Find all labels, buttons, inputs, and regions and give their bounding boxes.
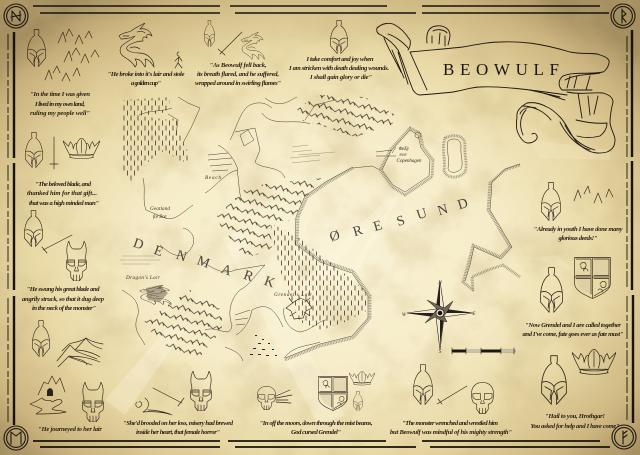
quote: Beowulf fell back	[195, 62, 281, 87]
ORESUND label: D	[456, 196, 470, 213]
DENMARK label: M	[195, 254, 212, 272]
quote: already in youth: glorious deeds!"	[558, 235, 598, 242]
icon: lair mountain and horned skull	[30, 376, 104, 422]
quote: called together	[522, 322, 624, 338]
quote: already in youth: "Already in youth I have done many	[534, 226, 623, 233]
quote: comfort and joy: I shall gain glory or die"	[309, 74, 372, 81]
DENMARK label: A	[219, 262, 234, 280]
map labels	[125, 146, 422, 298]
quote: journeyed: "He journeyed to her lair	[38, 426, 102, 433]
ORESUND label: S	[395, 213, 407, 230]
forest: north west	[122, 97, 192, 182]
icon: helmet and shield	[541, 258, 610, 312]
icon: helmet and mountains	[27, 29, 99, 81]
map	[120, 95, 520, 361]
quote: I was given: "In the time I was given	[30, 91, 90, 98]
DENMARK label: N	[174, 248, 189, 265]
quote: wrestled	[390, 420, 512, 436]
quote: comfort and joy	[288, 56, 389, 81]
ORESUND label: N	[436, 202, 450, 219]
icon: helmet over quote	[330, 20, 348, 54]
quote: I was given: I lived in my own land,	[34, 101, 85, 108]
DENMARK label: E	[152, 243, 165, 260]
quote: off the moors	[260, 420, 373, 436]
icon: helmet, sword and crown	[25, 132, 100, 169]
ORESUND label: U	[415, 206, 429, 223]
forts and settlements	[208, 147, 396, 356]
forest: east coast	[270, 223, 368, 330]
quote: Beowulf fell back: its breath flared, and he suffered,	[197, 71, 279, 78]
dragon's lair icon	[140, 285, 171, 305]
rivers and northern lakes	[120, 97, 335, 361]
quote: comfort and joy: I take comfort and joy when	[306, 56, 374, 63]
compass rose	[402, 280, 476, 355]
icon: dragon and walking figure	[119, 23, 182, 68]
quote: comfort and joy: I am stricken with death dealing wounds.	[288, 65, 389, 72]
ORESUND label: Ø	[328, 228, 342, 245]
eastern shore	[463, 164, 520, 290]
grendel's lair icon	[286, 298, 312, 319]
quote: off the moors: "In off the moors, down through the mist beams,	[260, 420, 373, 427]
quote: brooded: inside her heart, that female horror"	[136, 429, 220, 436]
map labels: Geatland	[150, 206, 170, 212]
quote: brooded	[123, 420, 234, 436]
island with Copenhagen	[353, 128, 433, 195]
quote: brooded: "She'd brooded on her loss, misery had brewed	[123, 420, 234, 427]
map labels: for Bor.	[153, 213, 168, 220]
quote: Beowulf fell back: "As Beowulf fell back,	[210, 62, 267, 69]
map labels: Grendel's Lair	[274, 292, 313, 298]
ORESUND label: E	[372, 218, 384, 235]
quote: I was given	[30, 91, 90, 117]
quote: hail Hrothgar: You asked for help and I have come"	[530, 423, 620, 430]
icon: helmet, sword and skull	[414, 365, 494, 414]
quote: beloved blade: that was a high minded man"	[29, 200, 99, 207]
quote: golden cup: "He broke into it's lair and stole	[108, 71, 185, 78]
ORESUND label	[328, 196, 470, 245]
panel: episode icons and quotes, left column	[22, 132, 105, 433]
panel: episode icons and quotes, right column	[522, 183, 624, 430]
quote: I was given: ruling my people well"	[30, 110, 90, 117]
rune medallion: bottom right	[612, 425, 636, 449]
compass rose: E	[471, 311, 476, 317]
DENMARK label: K	[262, 274, 277, 291]
map labels: Beach	[205, 175, 221, 181]
quote: Beowulf fell back: wrapped around in swirling flames"	[195, 80, 281, 87]
map labels: Dragon's Lair	[125, 275, 161, 281]
DENMARK label: D	[131, 236, 146, 253]
panel: episode icons and quotes, bottom row	[123, 365, 512, 436]
quote: already in youth	[534, 226, 623, 242]
DENMARK label	[131, 236, 277, 291]
icon: shield, crown and small helmet	[318, 371, 375, 411]
east coast of Denmark	[285, 167, 370, 360]
quote: beloved blade: thanked him for that gift...	[27, 190, 97, 197]
compass rose: W	[402, 312, 407, 318]
title banner	[377, 23, 615, 153]
compass rose: S	[439, 349, 442, 355]
quote: off the moors: God cursed Grendel"	[291, 429, 341, 436]
quote: hail Hrothgar: "Hail to you, Hrothgar!	[545, 413, 605, 420]
icon: helmet, sword and horned skull	[24, 210, 87, 281]
icon: scratches, sword and horned skull	[136, 371, 212, 415]
mountains: central	[215, 178, 322, 258]
rune medallion: top right	[611, 4, 635, 28]
quote: wrestled: "The monster wrenched and wrestled him	[402, 420, 498, 427]
quote: called together: and I've come, fate goes ever as fate must"	[522, 331, 624, 338]
compass rose: N	[437, 280, 442, 286]
quote: great blade: "He swung his great blade and	[26, 286, 100, 293]
quote: golden cup: a golden cup"	[131, 80, 161, 87]
mountains: south west	[142, 290, 222, 360]
map labels: Copenhagen	[396, 158, 422, 164]
rune medallion: bottom left	[4, 426, 28, 450]
quote: wrestled: but Beowulf was mindful of his mighty strength"	[390, 429, 512, 436]
map labels: the Ey	[399, 146, 410, 152]
mountains: north	[297, 95, 395, 137]
quote: hail Hrothgar	[530, 413, 620, 430]
icon: helmet and mountains	[542, 183, 613, 220]
DENMARK label: R	[241, 268, 256, 286]
title text: BEOWULF	[443, 60, 559, 79]
quote: called together: "Now Grendel and I are called together	[525, 322, 621, 329]
icon: skull and mist lines	[257, 386, 292, 410]
panel: episode icons and quotes, top row	[27, 20, 389, 117]
quote: great blade: angrily struck, so that it dug deep	[22, 296, 105, 303]
quote: golden cup	[108, 71, 185, 87]
scale bar	[452, 348, 515, 354]
icon: helmet and crown	[542, 349, 616, 404]
quote: beloved blade	[27, 181, 99, 207]
quote: great blade	[22, 286, 105, 312]
quote: great blade: in the neck of the monster"	[32, 305, 96, 312]
ORESUND label: R	[351, 223, 365, 240]
rune medallion: top left	[4, 4, 28, 28]
icon: helmet, sword and dragon	[204, 20, 264, 59]
quote: beloved blade: "The beloved blade, and	[35, 181, 92, 188]
icon: helmet and waves	[32, 320, 103, 367]
small eastern island	[443, 136, 466, 177]
map labels: eve	[400, 152, 407, 158]
